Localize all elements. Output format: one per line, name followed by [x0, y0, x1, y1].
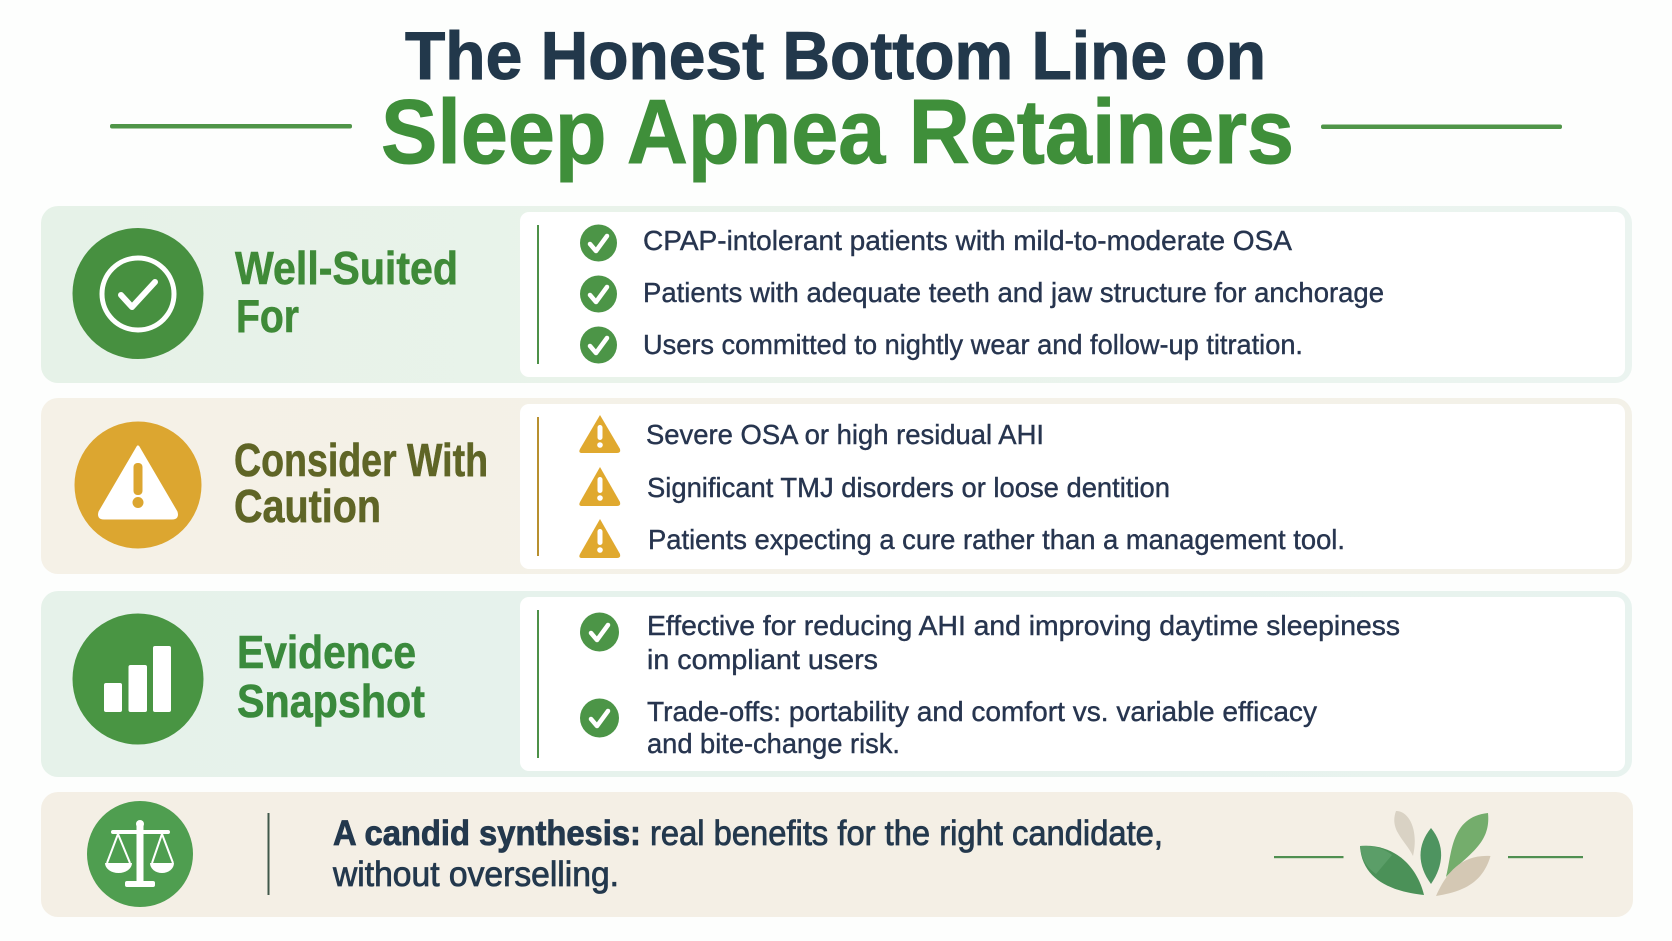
heading: evidence snapshot [237, 626, 425, 727]
icon: warning triangle large [74, 422, 202, 548]
list: caution items: Severe OSA or high residual AHI [646, 419, 1044, 450]
synthesis text [332, 814, 1163, 894]
icon: balance scale [87, 801, 193, 907]
list: caution items: Patients expecting a cure rather than a management tool. [648, 524, 1345, 555]
heading: consider with caution: Caution [234, 480, 381, 532]
title rule right [1321, 124, 1562, 129]
list: evidence items: Effective for reducing AHI and improving daytime sleepiness [647, 610, 1400, 641]
heading: consider with caution [234, 434, 488, 532]
list: well-suited items: Patients with adequate teeth and jaw structure for anchorage [643, 277, 1384, 308]
heading: well-suited for [235, 242, 458, 342]
list: evidence items: in compliant users [647, 644, 878, 675]
title line 2: Sleep Apnea Retainers [381, 82, 1294, 183]
heading: well-suited for: For [236, 290, 299, 342]
list: well-suited items: Users committed to nightly wear and follow-up titration. [643, 329, 1303, 360]
panel: candid synthesis [41, 792, 1633, 917]
synthesis text: A candid synthesis: real benefits for the right candidate, [333, 814, 1163, 853]
list: caution items: Significant TMJ disorders or loose dentition [647, 472, 1170, 503]
list: evidence items: Trade-offs: portability and comfort vs. variable efficacy [647, 696, 1317, 727]
icon: check in ring [72, 228, 204, 359]
list: evidence items: and bite-change risk. [647, 728, 900, 759]
heading: evidence snapshot: Evidence [237, 626, 416, 678]
list: well-suited items: CPAP-intolerant patients with mild-to-moderate OSA [643, 225, 1293, 256]
panel: evidence snapshot [41, 591, 1632, 777]
icon: bar chart [72, 614, 204, 744]
title [110, 18, 1562, 183]
heading: well-suited for: Well-Suited [235, 242, 458, 294]
panel: well-suited for [41, 206, 1632, 383]
list: well-suited items [580, 224, 1384, 364]
panel: consider with caution [41, 398, 1632, 574]
heading: evidence snapshot: Snapshot [237, 675, 425, 727]
title rule left [110, 124, 352, 128]
icon: leaf sprig [1274, 811, 1583, 896]
heading: consider with caution: Consider With [234, 434, 488, 486]
list: evidence items [580, 610, 1400, 759]
title line 1: The Honest Bottom Line on [405, 18, 1266, 94]
synthesis text: without overselling. [332, 855, 619, 894]
list: caution items [579, 415, 1345, 558]
